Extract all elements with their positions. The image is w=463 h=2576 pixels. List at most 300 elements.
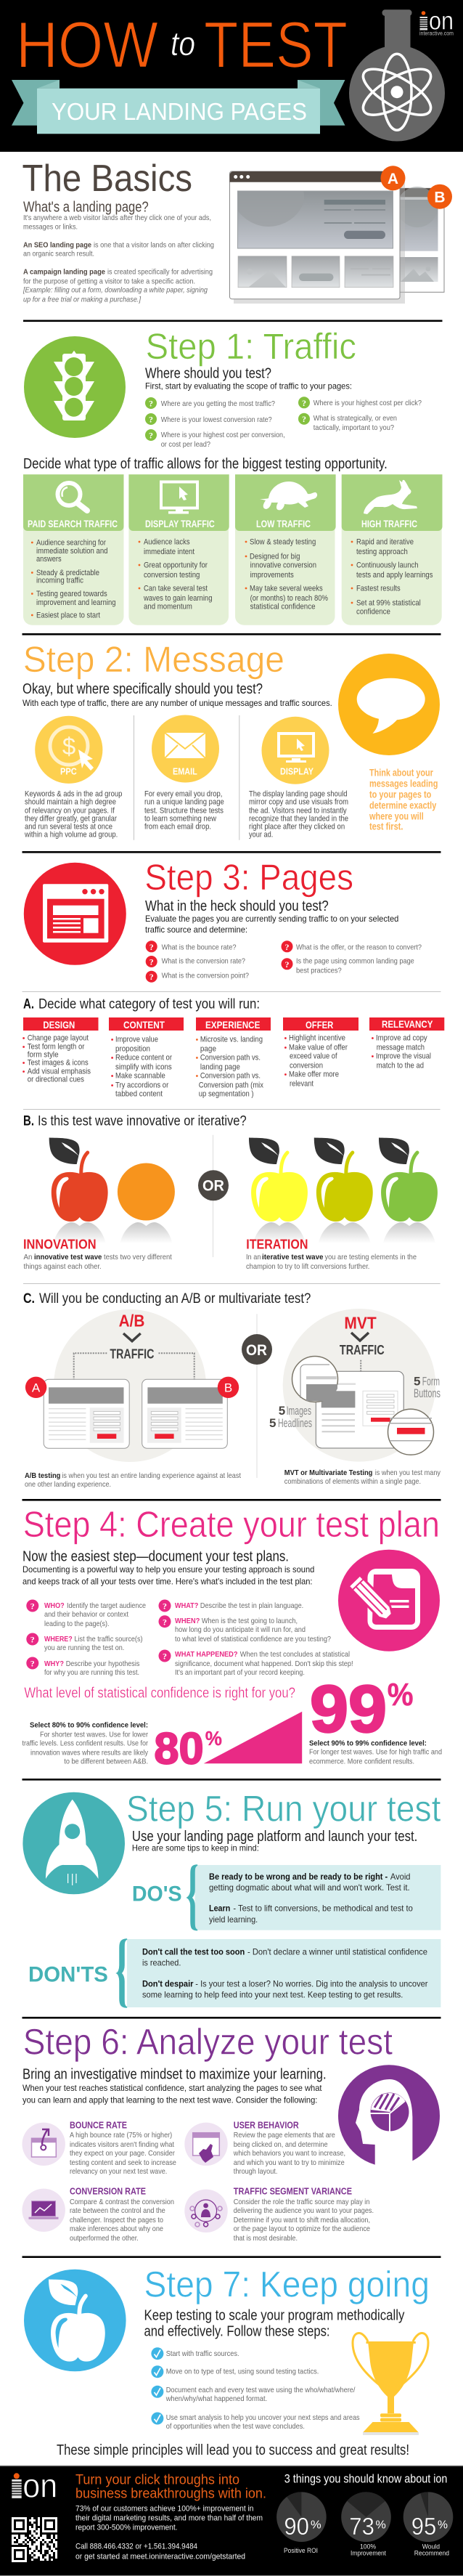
column: content	[109, 1017, 184, 1099]
list: what when what happened: to what level of statistical confidence are you testing?	[175, 1636, 331, 1643]
icon: laptop chart	[29, 2201, 58, 2219]
panel: do's	[132, 1865, 441, 1930]
text block: definition: an organic search result.	[23, 251, 94, 259]
panel: don'ts	[28, 1939, 441, 2007]
list: what when what happened: It's an important part of your record keeping.	[175, 1669, 305, 1677]
icon: ppc: $	[62, 733, 75, 760]
text: innovation: innovative test wave	[34, 1254, 102, 1261]
diagram: A/B test	[25, 1309, 239, 1462]
text: A/B testing definition: is when you test an entire landing experience against at least	[62, 1472, 241, 1480]
or badge	[198, 1170, 229, 1200]
item: user behavior: and which you want to try to minimize	[234, 2159, 345, 2167]
subheading: where should you test: Where should you test?	[145, 366, 271, 382]
text: customers and contact: Call 888.466.4332 or +1.561.394.9484	[75, 2543, 197, 2551]
icon: head with pie chart	[338, 2065, 440, 2171]
heading: step 6: Step 6: Analyze your test	[23, 2021, 393, 2062]
list: who where why: leading to the page(s).	[44, 1620, 109, 1628]
question list: Where are you getting the most traffic?	[161, 400, 275, 408]
brace	[117, 1939, 127, 2007]
item: traffic segment variance: delivering the audience you want to your pages.	[234, 2207, 374, 2215]
item: bounce rate	[22, 2121, 176, 2176]
text: MVT definition: is when you test many	[375, 1469, 441, 1477]
question list: ?	[149, 957, 154, 967]
text block: definition: A campaign landing page	[23, 269, 105, 277]
card: paid search traffic: answers	[36, 555, 62, 564]
subheading: launch: Use your landing page platform and launch your test.	[132, 1829, 417, 1845]
panel: don'ts: some learning to help feed into your next test. Keep testing to get results.	[142, 1990, 403, 2000]
illustration: iteration apples	[249, 1137, 438, 1243]
text: email: run a unique landing page	[144, 798, 224, 807]
icon: web page	[24, 863, 126, 965]
column: design: or directional cues	[28, 1076, 84, 1084]
column: relevancy: message match	[377, 1044, 425, 1052]
intro text: With each type of traffic, there are any number of unique messages and traffic sources.	[22, 699, 332, 708]
callout: think about your messages: test first.	[369, 821, 403, 832]
card: high traffic: HIGH TRAFFIC	[361, 519, 417, 529]
checklist: Use smart analysis to help you uncover your next steps and areas	[166, 2414, 360, 2422]
question list: ?	[149, 398, 153, 408]
text: 90 to 99 advice: Select 90% to 99% confidence level:	[309, 1740, 427, 1748]
text: customers and contact	[75, 2505, 263, 2561]
header banner	[0, 0, 463, 152]
card: display traffic: conversion testing	[144, 571, 200, 580]
column: content: simplify with icons	[115, 1063, 172, 1072]
text: iteration: you are testing elements in the	[325, 1254, 417, 1261]
question list: ?	[149, 972, 154, 982]
panel: don'ts: is reached.	[142, 1958, 181, 1968]
heading: step 7: Step 7: Keep going	[144, 2264, 430, 2304]
text: email: test. Structure these tests	[144, 807, 224, 816]
pie: 73% improvement: %	[376, 2519, 386, 2532]
heading: step 5: Step 5: Run your test	[126, 1788, 441, 1829]
text: innovation: things against each other.	[23, 1263, 102, 1271]
panel: do's: yield learning.	[209, 1914, 258, 1925]
icon: display	[261, 717, 329, 784]
panel: step 6 analyze	[22, 2021, 440, 2243]
column: relevancy	[369, 1017, 444, 1070]
icon: speech bubble	[338, 654, 440, 755]
logo: ion: on	[22, 2466, 57, 2504]
column: relevancy: match to the ad	[377, 1062, 424, 1070]
question list: ?	[149, 942, 154, 952]
label: 5 images 5 headlines: Images	[287, 1404, 311, 1418]
column: offer: OFFER	[306, 1019, 333, 1031]
text: customers and contact: 73% of our customers achieve 100%+ improvement in	[75, 2505, 254, 2514]
text: email	[144, 790, 224, 832]
text block: definition: An SEO landing page	[23, 242, 91, 250]
pie: 73% improvement: 73	[349, 2513, 374, 2540]
card: paid search traffic: Testing geared towards	[36, 590, 107, 598]
column: offer: Make offer more	[289, 1070, 339, 1079]
icon: email	[152, 715, 219, 783]
item: traffic segment variance: Consider the role the traffic source may play in	[234, 2198, 370, 2206]
panel: the basics	[22, 158, 452, 304]
subheading: investigative mindset: Bring an investigative mindset to maximize your learning.	[22, 2067, 327, 2083]
label: 5 form buttons: Buttons	[414, 1386, 441, 1400]
column: offer: exceed value of	[290, 1052, 337, 1061]
list: who where why: WHO?	[44, 1602, 65, 1610]
panel: step 2 message	[22, 639, 440, 840]
text: ppc: of relevancy on your pages. If	[25, 807, 115, 816]
pie: 73% improvement: 100%	[360, 2543, 376, 2551]
panel: don'ts: Don't call the test too soon	[142, 1947, 245, 1957]
text: display: recognize that they landed in the	[249, 815, 348, 824]
icon: audience network	[190, 2200, 222, 2227]
pie: 73% improvement	[341, 2492, 391, 2557]
icon: document and pencil	[338, 1550, 440, 1651]
text: 80 to 90 advice: Select 80% to 90% confidence level:	[30, 1722, 148, 1730]
column: experience: landing page	[200, 1063, 240, 1072]
diagram: A/B test: TRAFFIC	[110, 1347, 154, 1362]
text block: definition: is one that a visitor lands on after clicking	[94, 242, 214, 250]
text: ppc: should maintain a high degree	[25, 798, 116, 807]
panel: do's: DO'S	[132, 1882, 182, 1906]
card: low traffic: LOW TRAFFIC	[256, 519, 311, 529]
item: conversion rate	[22, 2186, 174, 2243]
title: HOW to TEST: TEST	[204, 9, 348, 82]
text: email: For every email you drop,	[144, 790, 222, 799]
icon: display: DISPLAY	[280, 766, 314, 777]
checklist	[151, 2347, 360, 2431]
text: innovation: tests two very different	[104, 1254, 172, 1261]
card: low traffic: May take several weeks	[250, 585, 323, 593]
text: email: to learn something new	[144, 815, 216, 824]
text: display: mirror copy and use visuals from	[249, 798, 348, 807]
heading: statistical confidence: What level of statistical confidence is right for you?	[24, 1685, 295, 1701]
subheading: document: Now the easiest step—document your test plans.	[22, 1548, 289, 1564]
text: email: from each email drop.	[144, 823, 211, 832]
text: A/B testing definition	[25, 1472, 241, 1489]
question list: or cost per lead?	[161, 441, 210, 449]
pie: 95% would recommend	[403, 2492, 453, 2557]
list: what when what happened: WHAT?	[175, 1602, 198, 1610]
number: 80%: 80	[154, 1723, 204, 1773]
or badge	[242, 1334, 272, 1365]
question list: ?	[284, 942, 289, 952]
card: high traffic: Set at 99% statistical	[356, 599, 421, 608]
callout: think about your messages: determine exactly	[369, 800, 437, 811]
text: 80 to 90 advice: For shorter test waves. Use for lower	[40, 1731, 148, 1739]
text block: definition: is created specifically for advertising	[107, 269, 213, 277]
heading C: AB or multivariate: C.	[23, 1291, 35, 1307]
column: experience: Conversion path vs.	[200, 1072, 261, 1081]
list: who where why: Describe your hypothesis	[66, 1660, 139, 1668]
brace	[187, 1865, 197, 1930]
icon: white apple	[24, 2270, 126, 2371]
text: A/B testing definition: one other landing experience.	[25, 1481, 111, 1489]
icon: rocket	[22, 1792, 125, 1894]
card: low traffic: Slow & steady testing	[250, 538, 316, 547]
item: conversion rate: make inferences about why one	[70, 2225, 163, 2233]
list: who where why: and their behavior or context	[44, 1611, 128, 1619]
question list: What is the conversion rate?	[162, 958, 245, 966]
heading: step 2: Step 2: Message	[23, 639, 284, 680]
list: what when what happened: When is the test going to launch,	[202, 1617, 298, 1625]
column: offer: conversion	[290, 1062, 323, 1070]
subheading: keep testing: Keep testing to scale your program methodically	[144, 2307, 404, 2323]
column: content: Try accordions or	[115, 1081, 169, 1090]
panel: don'ts: - Is your test a loser? No worries. Dig into the analysis to uncover	[195, 1979, 428, 1989]
text: 80 to 90 advice: traffic levels. Less confident results. Use for	[22, 1740, 148, 1748]
item: user behavior: being clicked on, and determine	[234, 2141, 328, 2149]
panel: don'ts: DON'TS	[28, 1962, 108, 1986]
list: who where why: List the traffic source(s)	[74, 1636, 142, 1643]
item: traffic segment variance	[184, 2186, 374, 2243]
checklist: Document each and every test wave using the who/what/where/	[166, 2386, 356, 2394]
card: display traffic: waves to gain learning	[143, 594, 213, 603]
item: bounce rate: testing content and seek to increase	[70, 2159, 176, 2167]
text: 80 to 90 advice	[22, 1722, 149, 1766]
heading: decide traffic type: Decide what type of traffic allows for the biggest testing opportunity.	[23, 456, 388, 472]
card: low traffic: (or months) to reach 80%	[250, 594, 329, 603]
badge: A	[380, 166, 405, 190]
badge: A	[25, 1377, 46, 1398]
column: offer: Highlight incentive	[289, 1034, 345, 1043]
label: 5 form buttons: Form	[422, 1374, 440, 1388]
question list: Where is your highest cost per conversion,	[161, 431, 285, 439]
logo: ion interactive: on	[429, 7, 454, 36]
intro text: you can learn and apply that learning to the next test wave. Consider the following:	[22, 2096, 317, 2105]
ribbon: your landing pages	[12, 80, 345, 134]
column: experience: EXPERIENCE	[205, 1019, 260, 1031]
list: who where why: WHY?	[44, 1660, 64, 1668]
column: content: CONTENT	[123, 1019, 165, 1031]
text: MVT definition	[284, 1469, 441, 1486]
text: iteration: ITERATION	[246, 1238, 308, 1252]
question list: tactically, important to you?	[314, 424, 394, 432]
icon: turtle	[260, 482, 317, 510]
heading B: innovative or iterative: B.	[23, 1113, 34, 1129]
list: what when what happened: ?	[163, 1617, 167, 1627]
intro text: Evaluate the pages you are currently sending traffic to on your selected	[145, 914, 398, 924]
card: paid search traffic: Easiest place to start	[36, 612, 100, 620]
checklist: when/why/what happened format.	[165, 2395, 267, 2403]
text: 80 to 90 advice: innovation waves where results are likely	[30, 1750, 149, 1758]
card: display traffic: and momentum	[144, 603, 192, 612]
or badge: OR	[246, 1342, 267, 1359]
chart: confidence wedge 80 to 99	[154, 1672, 414, 1773]
icon: ppc	[35, 716, 102, 784]
checklist: Move on to type of test, using sound testing tactics.	[166, 2368, 319, 2376]
panel: step 1 traffic	[23, 326, 443, 625]
icon: monitor cursor	[161, 482, 197, 514]
icon: flask with atom	[349, 9, 445, 141]
icon: magnifier	[58, 483, 87, 511]
text: 80 to 90 advice: to be different between A&B.	[64, 1758, 148, 1766]
text block: definition: [Example: filling out a form, downloading a white paper, signing	[22, 287, 208, 295]
list: who where why	[26, 1599, 146, 1677]
callout: think about your messages: where you will	[369, 811, 424, 822]
card: high traffic: Fastest results	[356, 585, 401, 593]
illustration: A/B landing page browsers	[229, 166, 452, 304]
panel: step 5 run your test	[22, 1788, 441, 2007]
card: display traffic: Great opportunity for	[144, 561, 208, 570]
text: innovation: INNOVATION	[23, 1238, 97, 1252]
list: what when what happened: WHAT HAPPENED?	[175, 1651, 238, 1659]
text: display: the ad. Visitors need to instantly	[249, 807, 347, 816]
text block: definition	[22, 214, 214, 304]
text: display	[249, 790, 348, 840]
text: MVT definition: combinations of elements within a single page.	[284, 1478, 421, 1486]
icon: trophy	[353, 2333, 428, 2435]
title: HOW to TEST: HOW	[16, 9, 158, 82]
heading A: category of test: A.	[23, 996, 34, 1012]
callout: think about your messages: messages leading	[369, 779, 438, 789]
text: customers and contact: report 300-500% improvement.	[75, 2524, 177, 2532]
text: customers and contact: their digital marketing results, and more than half of them	[75, 2514, 263, 2523]
logo: ion interactive: interactive.com	[419, 31, 454, 37]
number: 99%: 99	[310, 1672, 387, 1746]
badge: B	[427, 184, 452, 209]
illustration: innovation red apple and orange	[49, 1137, 175, 1243]
heading: step 1: Step 1: Traffic	[146, 326, 356, 367]
card: display traffic	[128, 474, 229, 625]
column: relevancy: RELEVANCY	[382, 1018, 433, 1030]
title: HOW to TEST: to	[171, 25, 195, 62]
item: user behavior: which behaviors you want to increase,	[233, 2150, 345, 2158]
column: offer	[283, 1017, 358, 1089]
list: what when what happened: When the test concludes at statistical	[240, 1651, 350, 1659]
text: customers and contact: or get started at meet.ioninteractive.com/getstarted	[75, 2553, 245, 2561]
icon: bounce	[32, 2129, 56, 2157]
text: iteration: champion to try to lift conversions further.	[246, 1263, 369, 1271]
question list	[146, 940, 422, 983]
subheading: where specifically: Okay, but where specifically should you test?	[22, 681, 263, 697]
text: ppc	[24, 790, 122, 840]
list: who where why: ?	[30, 1635, 35, 1645]
panel: step 3 pages	[22, 857, 444, 1489]
subheading: keep testing: and effectively. Follow these steps:	[144, 2324, 329, 2340]
list: who where why: ?	[30, 1601, 35, 1612]
column: relevancy: Improve the visual	[376, 1052, 431, 1061]
panel: don'ts: - Don't declare a winner until statistical confidence	[247, 1947, 427, 1957]
zoom lens: buttons	[388, 1409, 434, 1455]
badge: A: A	[388, 171, 398, 187]
list: what when what happened: significance, document what happened. Don't skip this step!	[175, 1660, 353, 1668]
text: 90 to 99 advice	[309, 1740, 442, 1766]
text: display: your ad.	[249, 831, 273, 840]
heading B: innovative or iterative: Is this test wave innovative or iterative?	[38, 1113, 247, 1129]
badge: A: A	[32, 1381, 41, 1394]
question list: Is the page using common landing page	[296, 958, 414, 966]
panel: do's: - Test to lift conversions, be methodical and test to	[233, 1903, 413, 1914]
intro text	[22, 2084, 322, 2105]
item: traffic segment variance: Determine if you want to shift media allocation,	[234, 2217, 370, 2224]
item: user behavior: Review the page elements that are	[234, 2132, 335, 2140]
footer	[0, 2466, 463, 2576]
text: innovation: An	[23, 1254, 33, 1261]
panel: step 4 test plan	[22, 1504, 442, 1773]
card: high traffic: Rapid and iterative	[356, 538, 414, 547]
label: 5 images 5 headlines	[269, 1404, 312, 1430]
text: ppc: and run several tests at once	[25, 823, 112, 832]
pie: 95% would recommend: %	[438, 2519, 448, 2532]
zoom lens: images and headlines	[292, 1357, 338, 1402]
question list: ?	[284, 959, 289, 970]
column: content: Reduce content or	[115, 1054, 172, 1063]
icon: hand on window	[193, 2133, 219, 2163]
label: 5 form buttons: 5	[414, 1374, 420, 1388]
pie: 90% positive ROI: Positive ROI	[284, 2547, 318, 2554]
card: low traffic: improvements	[250, 571, 294, 580]
card: display traffic: Audience lacks	[144, 538, 190, 547]
list: who where why: ?	[30, 1659, 35, 1669]
question list	[145, 397, 422, 449]
badge: B: B	[434, 189, 446, 206]
page B	[142, 1379, 227, 1448]
panel: do's: getting dogmatic about what will and won't work. Test it.	[209, 1882, 410, 1893]
column: content: tabbed content	[115, 1090, 163, 1099]
intro text: traffic source and determine:	[145, 925, 247, 935]
pie: 90% positive ROI	[276, 2492, 327, 2554]
card: low traffic	[235, 474, 336, 625]
or badge: OR	[202, 1177, 224, 1194]
card: low traffic: innovative conversion	[250, 561, 316, 570]
column: design: Add visual emphasis	[28, 1068, 91, 1076]
list: who where why: for why you are running this test.	[44, 1669, 139, 1677]
subheading: what in the heck: What in the heck should you test?	[145, 898, 329, 914]
column: content: Improve value	[115, 1036, 158, 1044]
item: bounce rate: they expect on your page. Consider	[70, 2150, 175, 2158]
badge: B	[218, 1377, 239, 1398]
callout: think about your messages: to your pages to	[369, 789, 431, 800]
card: paid search traffic: PAID SEARCH TRAFFIC	[28, 519, 118, 529]
column: design	[22, 1017, 99, 1084]
badge: B: B	[224, 1381, 232, 1394]
qr code	[12, 2517, 57, 2562]
text: innovation	[23, 1238, 172, 1271]
headline: turn your click throughs	[75, 2472, 266, 2502]
list: who where why: WHERE?	[44, 1636, 73, 1643]
pie: 73% improvement: Improvement	[351, 2550, 386, 2557]
list: what when what happened: how long do you anticipate it will run for, and	[175, 1626, 306, 1634]
text: iteration	[246, 1238, 417, 1271]
pie: 95% would recommend: Recommend	[414, 2550, 449, 2557]
diagram: MVT test: MVT	[344, 1313, 377, 1332]
text block: definition: It's anywhere a web visitor lands after they click one of your ads,	[23, 214, 211, 222]
column: experience: Microsite vs. landing	[200, 1036, 263, 1044]
column: experience: Conversion path vs.	[200, 1054, 261, 1063]
pie: 95% would recommend: Would	[422, 2543, 440, 2551]
label: 5 images 5 headlines: 5	[269, 1416, 276, 1430]
question list: ?	[302, 414, 306, 424]
text: ppc: within a high volume ad group.	[24, 831, 118, 840]
list: who where why: Identify the target audience	[67, 1602, 146, 1610]
column: design: form style	[28, 1051, 59, 1060]
diagram: A/B test: A/B	[119, 1312, 144, 1330]
card: paid search traffic: incoming traffic	[36, 577, 84, 585]
card: paid search traffic: Steady & predictable	[36, 569, 99, 577]
card: high traffic: confidence	[356, 608, 390, 617]
heading C: AB or multivariate: Will you be conducting an A/B or multivariate test?	[39, 1291, 311, 1307]
question list: ?	[149, 430, 153, 440]
checklist: Start with traffic sources.	[166, 2350, 239, 2358]
card: high traffic	[342, 474, 443, 625]
title: HOW to TEST	[16, 9, 348, 82]
list: what when what happened: ?	[163, 1651, 167, 1662]
card: low traffic: Designed for big	[250, 553, 300, 561]
label: 5 images 5 headlines: 5	[279, 1404, 285, 1418]
subheading: keep testing	[144, 2307, 404, 2340]
card: display traffic: Can take several test	[144, 585, 208, 593]
text: display: The display landing page should	[249, 790, 348, 799]
item: traffic segment variance: TRAFFIC SEGMENT VARIANCE	[234, 2186, 352, 2196]
column: experience: Conversion path (mix	[199, 1081, 264, 1090]
column: experience	[196, 1017, 271, 1099]
item: user behavior: through layout.	[234, 2168, 277, 2176]
item: traffic segment variance: or the page layout to optimize for the audience	[234, 2225, 370, 2233]
column: design: DESIGN	[43, 1019, 75, 1031]
